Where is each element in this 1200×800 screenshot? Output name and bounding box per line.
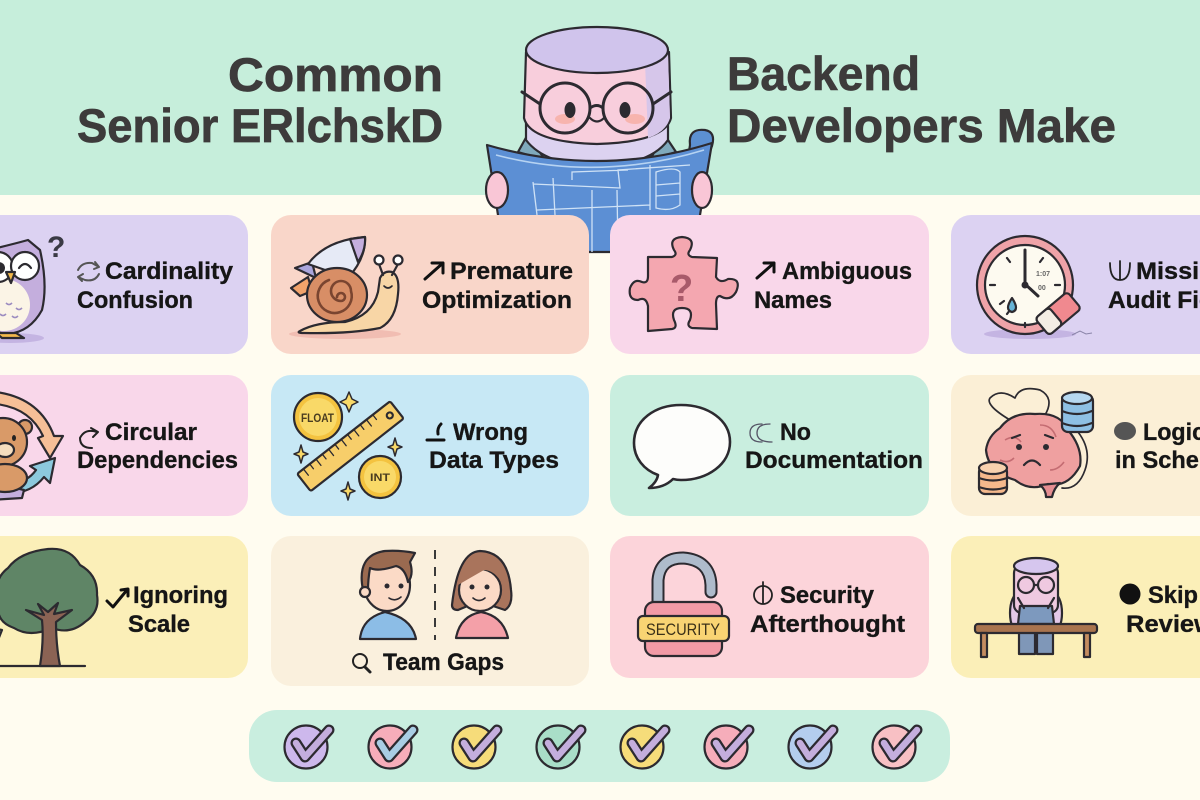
- footer pill with check badges: [249, 710, 950, 782]
- icon: bullet glyph: [1120, 584, 1140, 604]
- panel: Circular Dependencies: [0, 375, 248, 516]
- check: yellow: [452, 726, 497, 768]
- check: pink 2: [704, 726, 749, 768]
- panel: Ignoring Scale: [0, 536, 248, 678]
- mascot: database cylinder with glasses holding blueprint: [486, 27, 713, 252]
- panel: Ambiguous Names: [610, 215, 929, 354]
- icon: mascot at bench: [975, 558, 1097, 657]
- icon: loops glyph: [750, 424, 772, 442]
- panel: Team Gaps: [271, 536, 589, 686]
- icon: open padlock: [638, 558, 729, 656]
- check: mint: [536, 726, 581, 768]
- panel: Circular Dependencies: Dependencies: [77, 447, 238, 474]
- title: left part: [77, 48, 443, 152]
- icon: empty speech bubble: [634, 405, 730, 488]
- icon: ruler with float and int coins: [294, 392, 404, 500]
- icon: confused owl: [0, 231, 65, 343]
- check: rose: [872, 726, 917, 768]
- panel: Skip Review: [951, 536, 1200, 678]
- icon: ruler with float and int coins: INT: [370, 472, 390, 484]
- panel: No Documentation: No: [780, 419, 811, 446]
- icon: trend glyph: [107, 589, 128, 607]
- icon: clock with eraser: 1:07: [1036, 271, 1050, 278]
- icon: confused owl: ?: [47, 231, 65, 264]
- icon: arrow glyph: [757, 263, 774, 278]
- icon: anchor glyph: [1110, 261, 1130, 280]
- icon: puzzle piece with question mark: [630, 237, 738, 331]
- panel: Premature Optimization: [271, 215, 589, 354]
- title: right part: Developers Make: [727, 99, 1116, 152]
- panel: Premature Optimization: Premature: [450, 258, 573, 285]
- panel: Security Afterthought: Afterthought: [750, 611, 905, 638]
- check: yellow 2: [620, 726, 665, 768]
- icon: arrows glyph: [78, 262, 99, 281]
- header band: [0, 0, 1200, 195]
- panel: Ambiguous Names: Names: [754, 287, 832, 314]
- icon: girl: [452, 551, 511, 638]
- panel: Wrong Data Types: Data Types: [429, 447, 559, 474]
- icon: boy: [360, 551, 416, 639]
- panel: Premature Optimization: Optimization: [422, 287, 572, 314]
- icon: refresh glyph: [80, 428, 98, 448]
- panel: Team Gaps: Team Gaps: [383, 649, 504, 676]
- icon: tangled brain with databases: [979, 389, 1093, 497]
- check: blue: [788, 726, 833, 768]
- panel: No Documentation: Documentation: [745, 447, 923, 474]
- panel: Logic in Schema: [951, 375, 1200, 516]
- icon: pin glyph: [427, 424, 444, 440]
- panel: Cardinality Confusion: [0, 215, 248, 354]
- icon: tree: [0, 549, 98, 666]
- panel: Cardinality Confusion: Confusion: [77, 287, 193, 314]
- panel: Ignoring Scale: Ignoring: [133, 582, 228, 609]
- title: right part: Backend: [727, 47, 920, 100]
- panel: Wrong Data Types: Wrong: [453, 419, 528, 446]
- icon: snail with rocket: [289, 237, 402, 339]
- panel: Cardinality Confusion: Cardinality: [105, 258, 234, 285]
- panel: Wrong Data Types: [271, 375, 589, 516]
- icon: clock with eraser: 00: [1038, 285, 1046, 292]
- panel: No Documentation: [610, 375, 929, 516]
- check: pink: [368, 726, 413, 768]
- panel: Missing Audit Fields: [951, 215, 1200, 354]
- icon: open padlock: SECURITY: [646, 620, 720, 639]
- panel: Ignoring Scale: Scale: [128, 611, 190, 638]
- panel: Security Afterthought: Security: [780, 582, 875, 609]
- icon: bear in circular arrows: [0, 392, 63, 500]
- icon: arrow glyph: [425, 263, 443, 279]
- panel: Ambiguous Names: Ambiguous: [782, 258, 912, 285]
- divider: dashed line: [434, 550, 436, 640]
- icon: brain glyph: [1114, 422, 1136, 440]
- check: purple: [284, 726, 329, 768]
- panel: Security Afterthought: [610, 536, 929, 678]
- icon: ruler with float and int coins: FLOAT: [301, 411, 335, 425]
- icon: power glyph: [754, 582, 772, 604]
- panel: Skip Review: Skip: [1148, 582, 1198, 609]
- icon: magnifier glyph: [353, 654, 370, 672]
- title: right part: [727, 47, 1116, 152]
- panel: Circular Dependencies: Circular: [105, 419, 197, 446]
- title: left part: Common: [228, 48, 443, 101]
- icon: puzzle piece with question mark: ?: [670, 268, 693, 310]
- icon: clock with eraser: [977, 236, 1092, 339]
- title: left part: Senior ERlchskD: [77, 99, 443, 152]
